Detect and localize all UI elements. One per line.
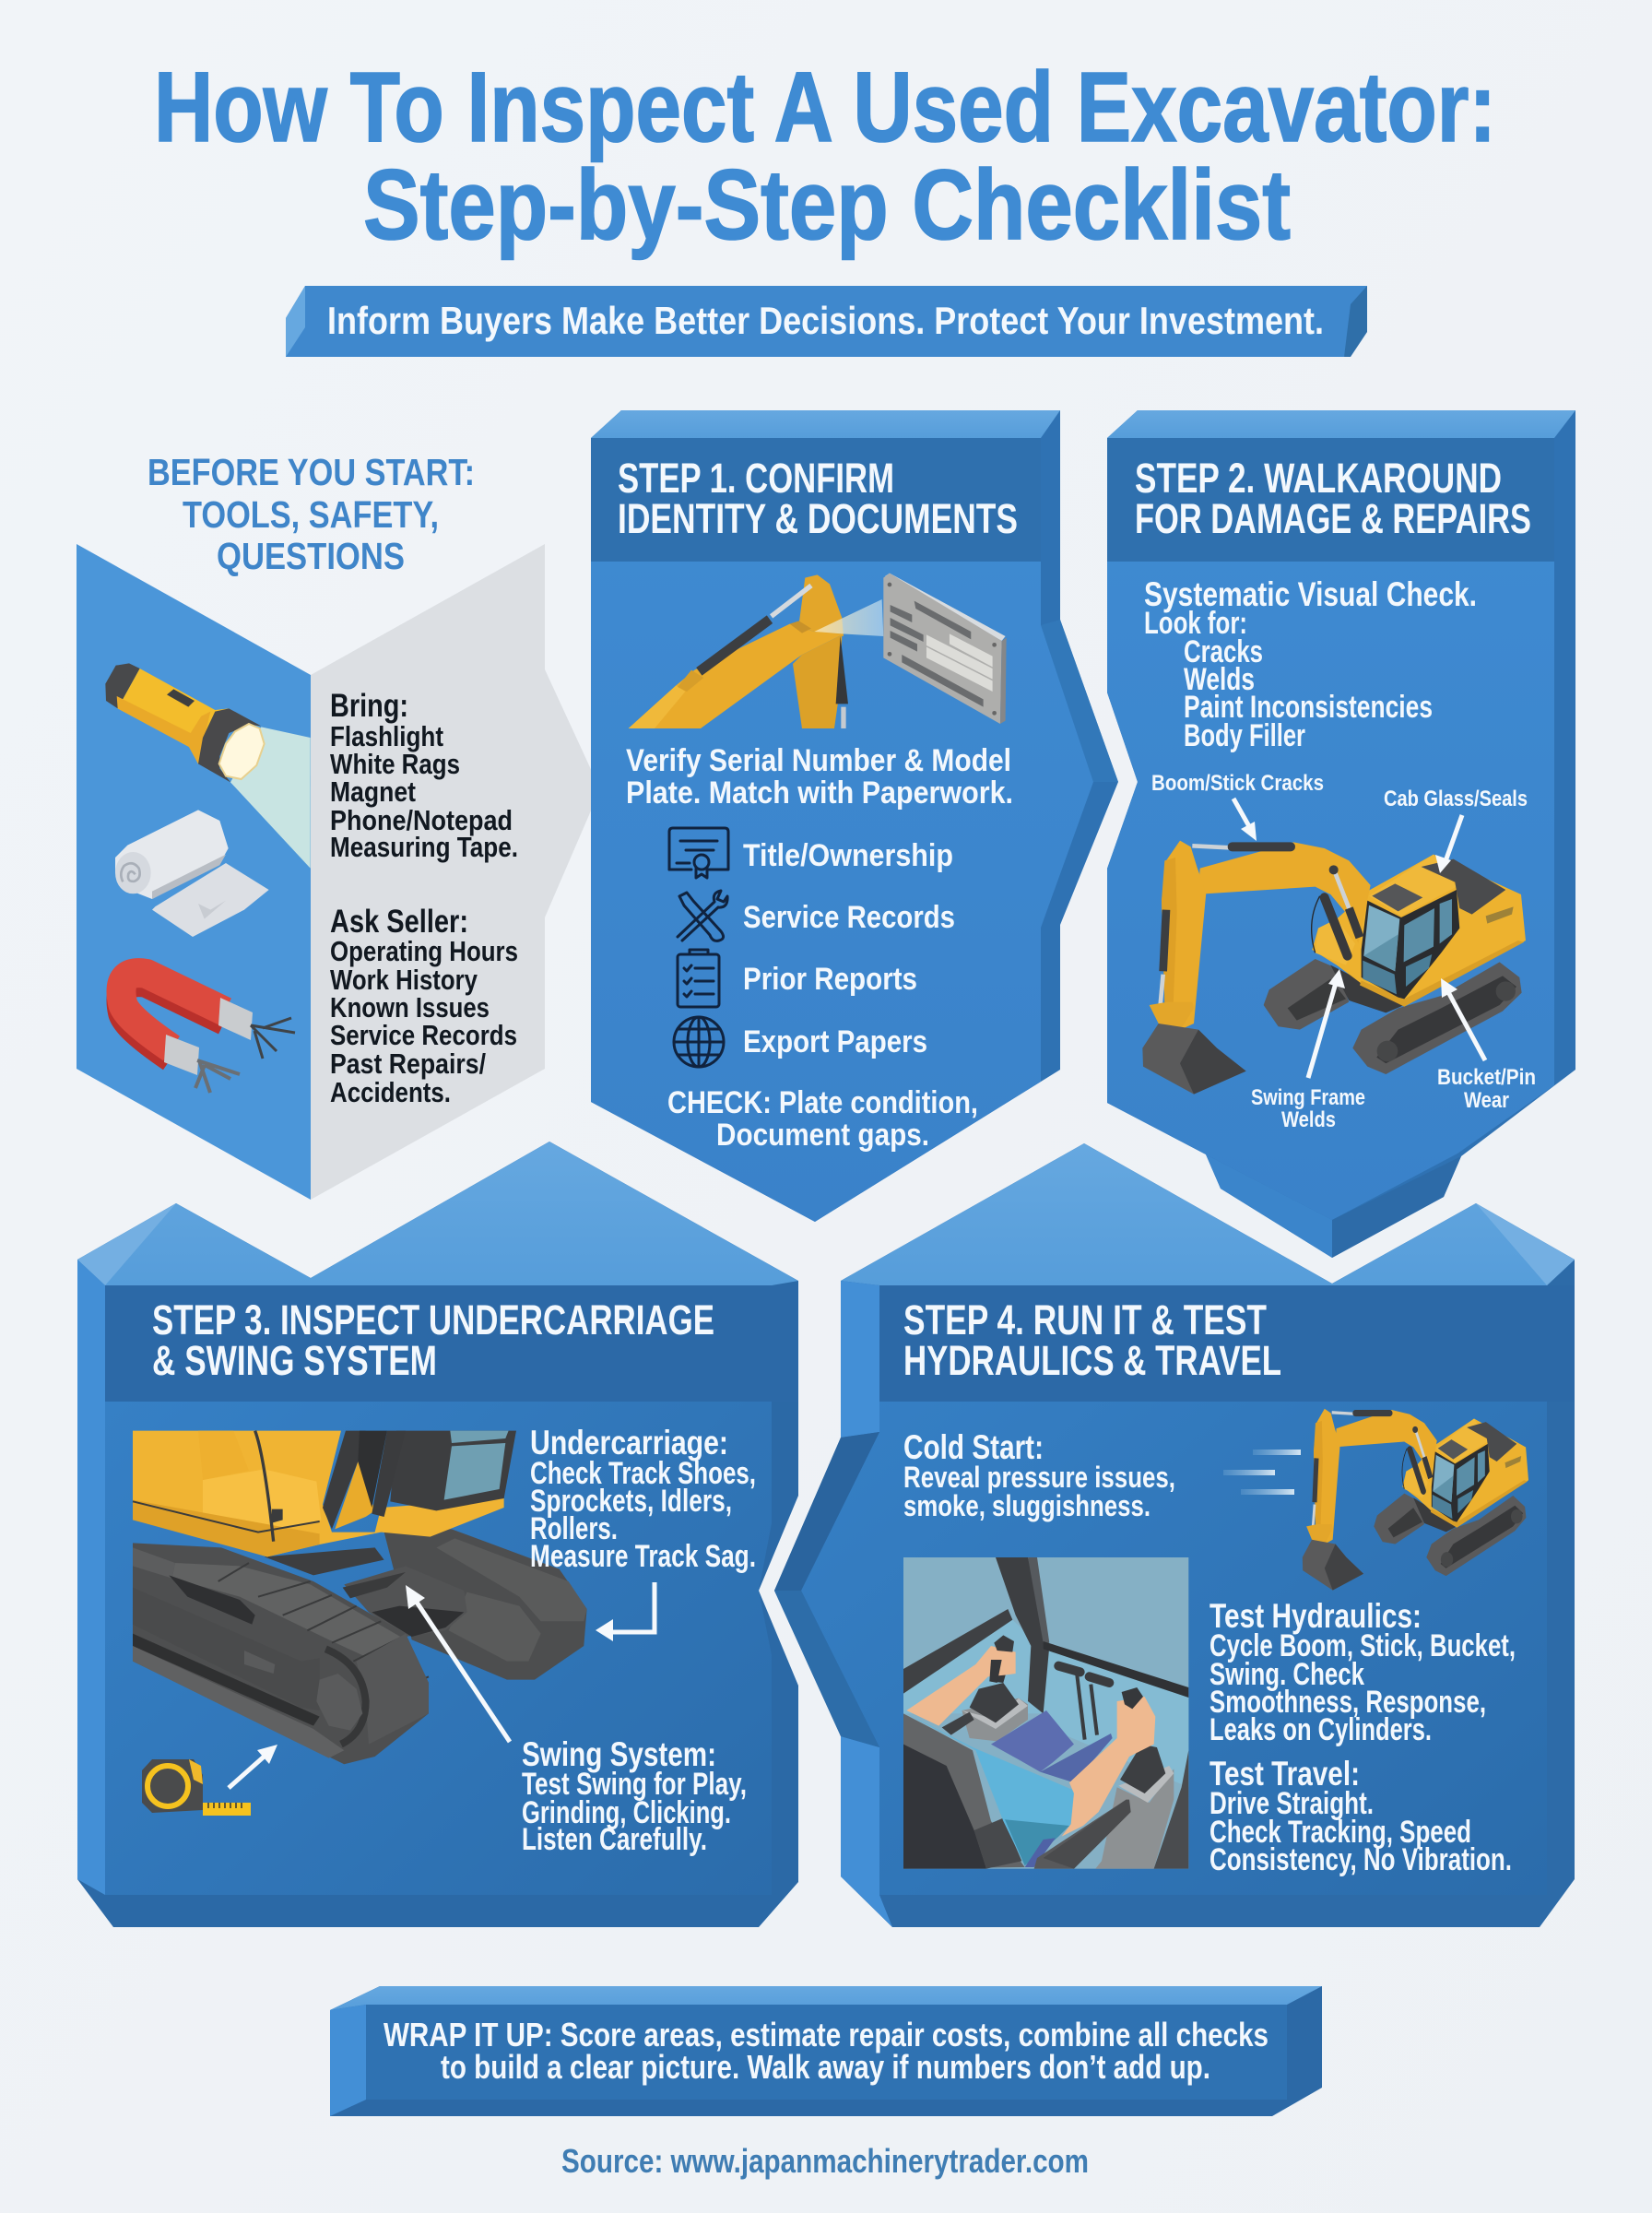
text: swing system: Listen Carefully. <box>522 1822 707 1857</box>
label: service records: Service Records <box>743 900 955 935</box>
illustration: small excavator <box>1303 1409 1528 1591</box>
step 4 header: STEP 4. RUN IT & TEST <box>903 1296 1267 1343</box>
text: test travel: Drive Straight. <box>1210 1786 1374 1821</box>
text: verify: Verify Serial Number & Model <box>626 743 1011 778</box>
text: systematic visual check: Welds <box>1184 662 1255 697</box>
text: systematic visual check: Systematic Visual Check. <box>1144 575 1477 613</box>
text: test hydraulics: Swing. Check <box>1210 1657 1364 1692</box>
text: systematic visual check <box>1144 575 1477 753</box>
arrow: boom/stick <box>1233 799 1257 841</box>
icon: flashlight <box>105 663 311 869</box>
step 1 header <box>591 438 1041 562</box>
text: cold start: Reveal pressure issues, <box>903 1461 1175 1494</box>
text: cold start <box>903 1428 1175 1522</box>
text: undercarriage: Undercarriage: <box>530 1424 728 1462</box>
label: prior reports: Prior Reports <box>743 962 917 997</box>
panel: step 3 <box>77 1142 798 1927</box>
text: swing system: Grinding, Clicking. <box>522 1795 731 1830</box>
text: undercarriage: Check Track Shoes, <box>530 1456 756 1491</box>
text: systematic visual check: Cracks <box>1184 634 1263 669</box>
arrow: swing frame <box>1308 969 1345 1078</box>
icon: clipboard <box>678 950 719 1007</box>
text: systematic visual check: Look for: <box>1144 606 1247 641</box>
text: ask seller list: Operating Hours <box>330 935 518 967</box>
icon: tape measure <box>142 1759 251 1816</box>
text: test hydraulics: Leaks on Cylinders. <box>1210 1712 1432 1747</box>
arrow: swing system <box>406 1585 510 1742</box>
arrow: bucket/pin <box>1441 978 1485 1060</box>
arrow: return to track <box>596 1582 655 1641</box>
title: Step-by-Step Checklist <box>363 148 1291 260</box>
step 4 header <box>879 1285 1575 1402</box>
heading: before you start: BEFORE YOU START: <box>148 451 475 493</box>
text: undercarriage: Rollers. <box>530 1511 618 1546</box>
text: swing system: Test Swing for Play, <box>522 1767 747 1802</box>
arrow: tape to track <box>229 1745 277 1788</box>
source line: Source: www.japanmachinerytrader.com <box>561 2142 1089 2180</box>
grey text facet <box>311 544 600 1200</box>
text: ask seller list: Past Repairs/ <box>330 1047 486 1080</box>
callout labels: Swing Frame <box>1251 1085 1365 1110</box>
text: ask seller list: Known Issues <box>330 991 490 1024</box>
icon: motion lines <box>1223 1450 1301 1495</box>
callout labels: Cab Glass/Seals <box>1384 787 1528 811</box>
heading: before you start: QUESTIONS <box>217 535 405 577</box>
step 1 header: STEP 1. CONFIRM <box>618 455 894 502</box>
label: export papers: Export Papers <box>743 1024 927 1059</box>
arrow: cab glass <box>1435 815 1462 873</box>
text: test hydraulics: Test Hydraulics: <box>1210 1597 1422 1635</box>
text: test travel: Test Travel: <box>1210 1755 1360 1793</box>
text: systematic visual check: Body Filler <box>1184 718 1305 753</box>
panel: step 2 <box>1107 410 1575 1258</box>
step 3 header: & SWING SYSTEM <box>152 1337 437 1384</box>
banner: wrap it up <box>330 1986 1322 2116</box>
callout labels <box>1151 771 1536 1132</box>
text: cold start: Cold Start: <box>903 1428 1044 1466</box>
heading: before you start: TOOLS, SAFETY, <box>183 493 439 536</box>
text: test travel: Check Tracking, Speed <box>1210 1815 1471 1850</box>
text: bring list: Flashlight <box>330 720 443 752</box>
text: ask seller list <box>330 904 518 1108</box>
text: test hydraulics: Cycle Boom, Stick, Bucket, <box>1210 1628 1516 1663</box>
text: systematic visual check: Paint Inconsistencies <box>1184 690 1433 725</box>
text: bring list: Magnet <box>330 775 416 808</box>
text: test hydraulics <box>1210 1597 1516 1747</box>
text: bring list: White Rags <box>330 748 460 780</box>
panel: step 1 <box>591 410 1118 1222</box>
icon: globe <box>674 1017 724 1067</box>
text: bring list: Phone/Notepad <box>330 804 513 836</box>
step 3 header: STEP 3. INSPECT UNDERCARRIAGE <box>152 1296 714 1343</box>
text: verify <box>626 743 1013 811</box>
text: undercarriage <box>530 1424 756 1574</box>
step 1 header: IDENTITY & DOCUMENTS <box>618 495 1018 542</box>
panel: before you start <box>77 544 600 1200</box>
callout labels: Bucket/Pin <box>1437 1065 1536 1090</box>
text: ask seller list: Accidents. <box>330 1076 451 1108</box>
text: ask seller list: Work History <box>330 964 478 996</box>
heading: before you start <box>148 451 475 577</box>
step 2 header <box>1107 438 1554 562</box>
text: undercarriage: Measure Track Sag. <box>530 1539 756 1574</box>
text: bring list: Bring: <box>330 688 408 724</box>
step 3 header <box>105 1285 798 1402</box>
banner: wrap it up: to build a clear picture. Walk away if numbers don’t add up. <box>441 2048 1210 2086</box>
text: check note: CHECK: Plate condition, <box>667 1085 978 1120</box>
text: verify: Plate. Match with Paperwork. <box>626 775 1013 811</box>
banner: wrap it up: WRAP IT UP: Score areas, estimate repair costs, combine all checks <box>384 2016 1268 2053</box>
text: test travel <box>1210 1755 1512 1877</box>
illustration: excavator <box>1142 841 1526 1095</box>
step 2 header: STEP 2. WALKAROUND <box>1135 455 1502 502</box>
text: bring list: Measuring Tape. <box>330 831 518 863</box>
callout labels: Welds <box>1281 1107 1336 1132</box>
icon: horseshoe magnet <box>121 973 295 1093</box>
illustration: undercarriage close-up <box>133 1431 587 1764</box>
text: check note <box>667 1085 978 1153</box>
text: ask seller list: Service Records <box>330 1019 517 1051</box>
text: check note: Document gaps. <box>716 1118 929 1153</box>
text: test travel: Consistency, No Vibration. <box>1210 1842 1512 1877</box>
label: title/ownership: Title/Ownership <box>743 838 953 873</box>
panel: step 4 <box>774 1143 1575 1927</box>
icon: white rag <box>115 810 269 937</box>
callout labels: Wear <box>1464 1088 1509 1113</box>
icon: wrench and screwdriver <box>678 891 727 941</box>
text: bring list <box>330 688 518 863</box>
title <box>154 51 1496 260</box>
step 4 header: HYDRAULICS & TRAVEL <box>903 1337 1281 1384</box>
illustration: operator cab <box>903 1557 1188 1869</box>
text: ask seller list: Ask Seller: <box>330 904 468 940</box>
text: test hydraulics: Smoothness, Response, <box>1210 1685 1486 1720</box>
blue tools facet <box>77 544 311 1200</box>
text: undercarriage: Sprockets, Idlers, <box>530 1484 732 1519</box>
illustration: boom and serial plate <box>629 574 1007 728</box>
subtitle banner: Inform Buyers Make Better Decisions. Protect Your Investment. <box>327 299 1324 342</box>
text: cold start: smoke, sluggishness. <box>903 1489 1150 1522</box>
text: swing system: Swing System: <box>522 1735 716 1773</box>
icon: certificate <box>669 828 728 878</box>
subtitle banner <box>286 286 1367 357</box>
text: swing system <box>522 1735 747 1857</box>
callout labels: Boom/Stick Cracks <box>1151 771 1324 796</box>
step 2 header: FOR DAMAGE & REPAIRS <box>1135 495 1531 542</box>
